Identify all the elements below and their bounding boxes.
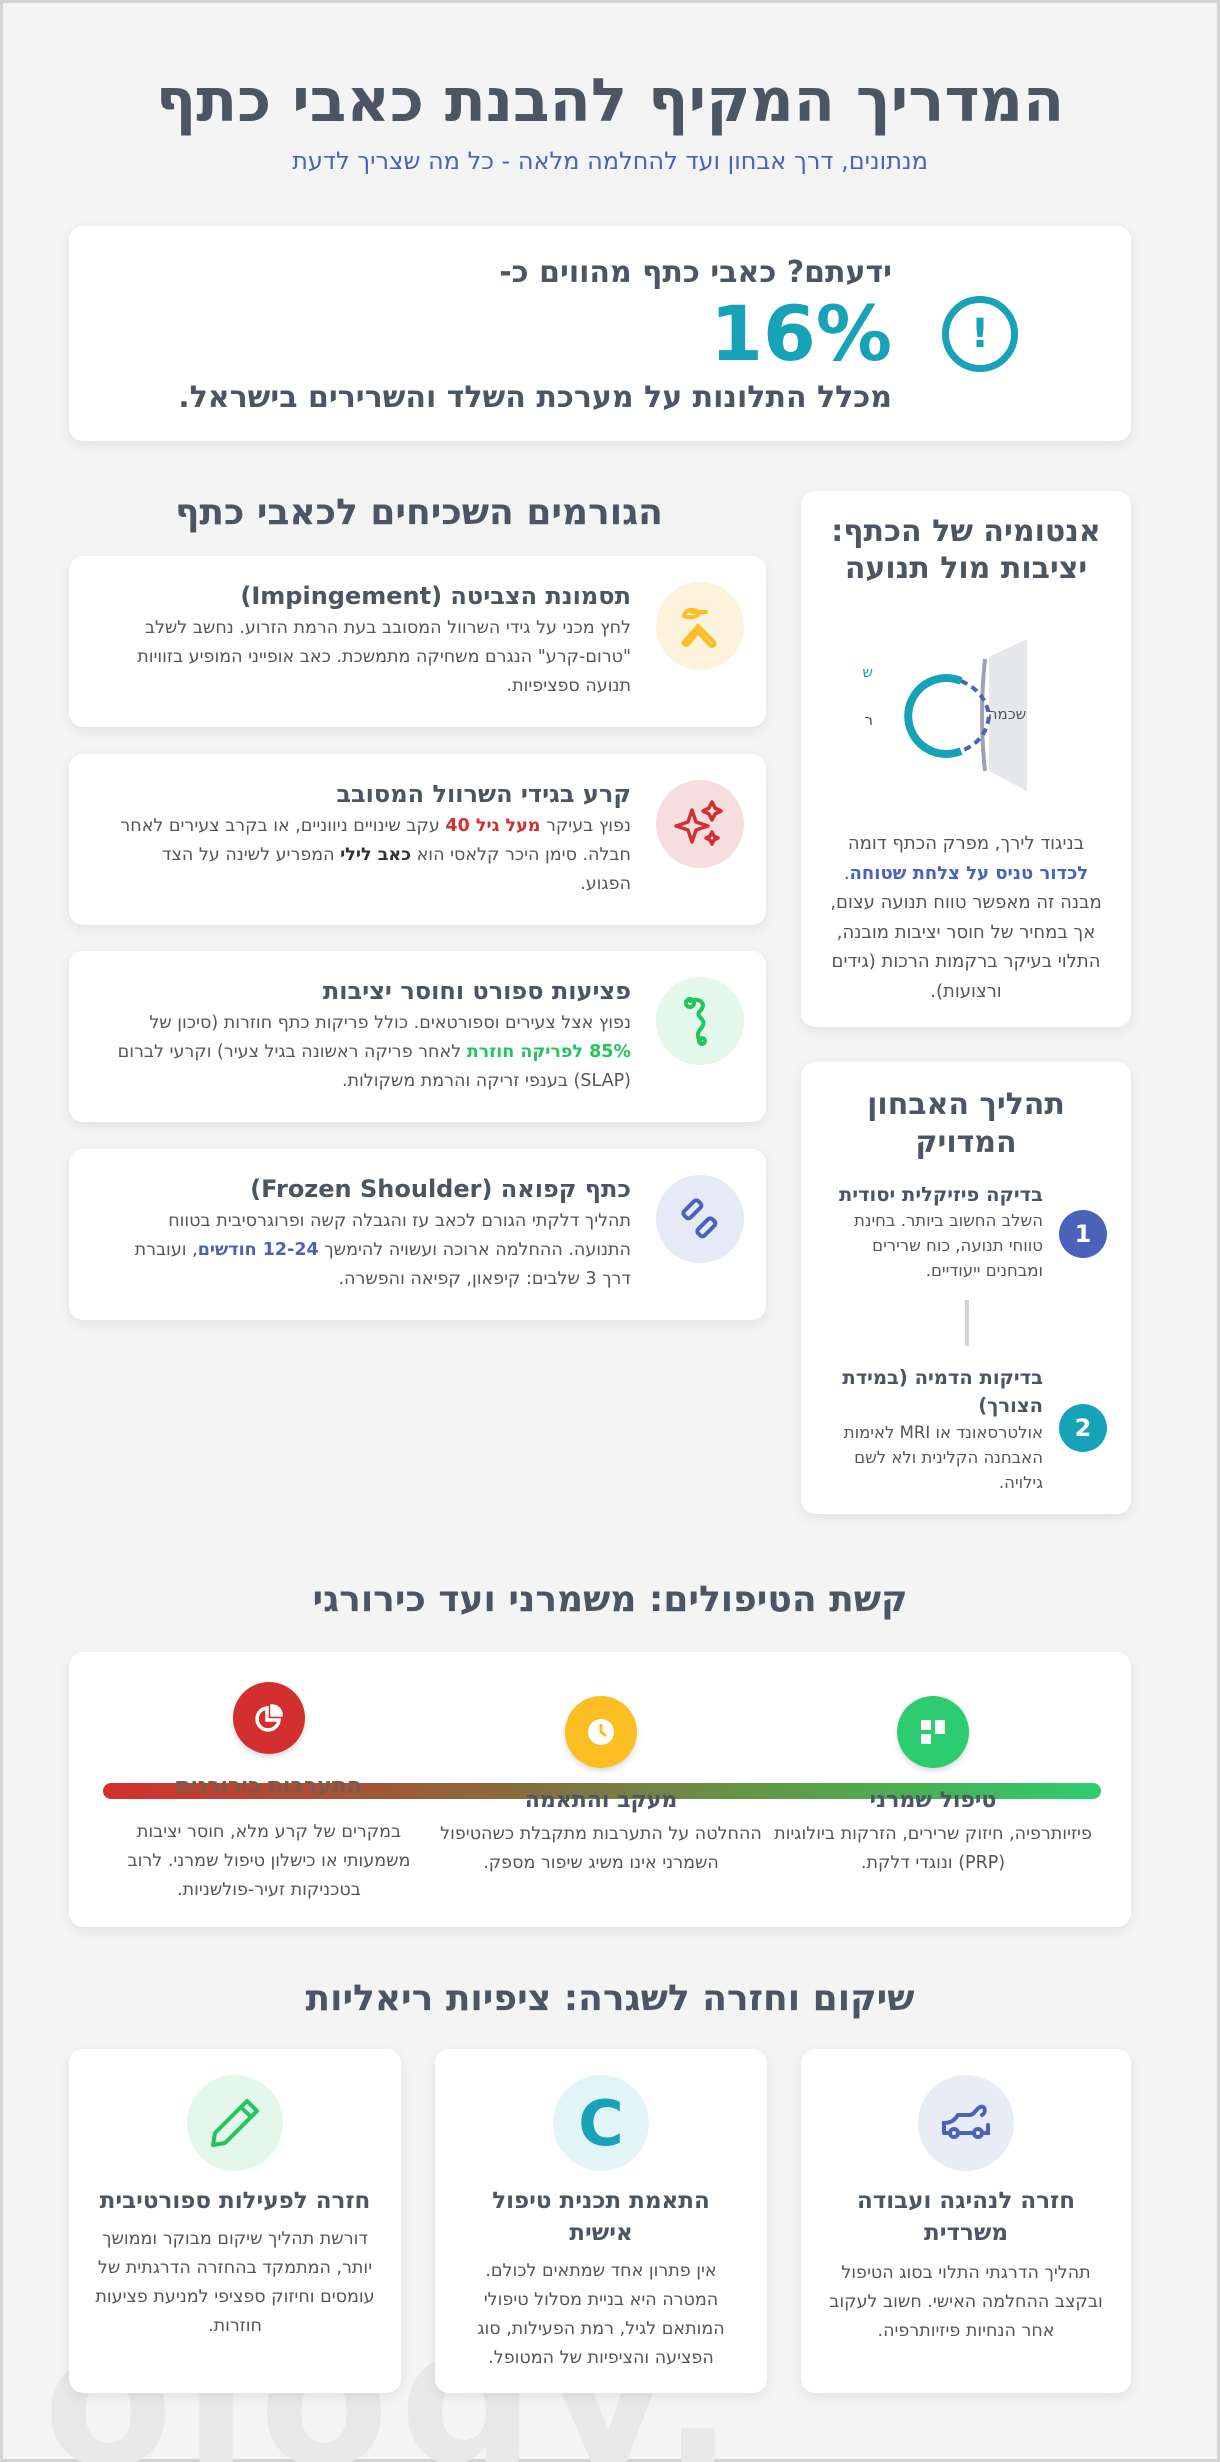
heading: anatomy: אנטומיה של הכתף: (831, 514, 1101, 549)
stage: monitoring (440, 1696, 762, 1873)
panel: cause 4 (69, 1149, 766, 1320)
icon: letter c: C (578, 2086, 624, 2160)
stage: monitoring: מעקב והתאמה (525, 1788, 677, 1813)
panel: cause 2: קרע בגידי השרוול המסובב (336, 780, 631, 808)
stage: conservative: טיפול שמרני (870, 1788, 996, 1813)
panel: cause 2: חבלה. סימן היכר קלאסי הוא כאב לילי המפריע לשינה על הצד (162, 845, 631, 865)
icon: exclamation: ! (971, 311, 989, 357)
panel: cause 2: הפגוע. (580, 874, 631, 894)
icon: car (918, 2075, 1014, 2171)
heading: diagnosis: המדויק (915, 1125, 1017, 1160)
panel: rehab driving (801, 2049, 1131, 2393)
icon: pencil (187, 2075, 283, 2171)
panel: cause 4: תהליך דלקתי הגורם לכאב עז והגבלה קשה ופרוגרסיבית בטווח (168, 1211, 631, 1231)
heading: diagnosis (867, 1087, 1065, 1160)
panel: cause 3: נפוץ אצל צעירים וספורטאים. כולל פריקות כתף חוזרות (סיכון של (149, 1013, 631, 1033)
panel: diagnosis (801, 1062, 1131, 1514)
stat text: ידעתם? כאבי כתף מהווים כ- (499, 255, 892, 290)
panel: cause 1 (69, 556, 766, 727)
step 2: בדיקות הדמיה (במידת הצורך) (842, 1366, 1043, 1417)
icon: sparkles (656, 780, 744, 868)
step 1: השלב החשוב ביותר. בחינת טווחי תנועה, כוח שרירים ומבחנים ייעודיים. (854, 1211, 1043, 1280)
text: anatomy: ורצועות). (930, 980, 1002, 1002)
panel: rehab personal plan (435, 2049, 767, 2393)
stage: surgery (128, 1682, 410, 1900)
panel: cause 1: לחץ מכני על גידי השרוול המסובב בעת הרמת הזרוע. נחשב לשלב "טרום-קרע" הנגרם משחיקה מתמשכת. כאב אופייני המופיע בזוויות תנועה ספציפיות. (137, 618, 631, 696)
icon: impingement (656, 582, 744, 670)
step 2 (842, 1366, 1107, 1492)
panel: rehab driving: חזרה לנהיגה ועבודה משרדית (857, 2188, 1075, 2246)
panel: cause 4: התנועה. ההחלמה ארוכה ועשויה להימשך 12-24 חודשים, ועוברת (135, 1240, 631, 1260)
heading: diagnosis: תהליך האבחון (867, 1087, 1065, 1122)
heading: treatments: קשת הטיפולים: משמרני ועד כירורגי (312, 1579, 908, 1620)
stat card (69, 226, 1131, 441)
title: המדריך המקיף להבנת כאבי כתף (156, 66, 1064, 136)
stat text: מכלל התלונות על מערכת השלד והשרירים בישראל. (178, 380, 892, 415)
stage: conservative: פיזיותרפיה, חיזוק שרירים, הזרקות ביולוגיות (PRP) ונוגדי דלקת. (774, 1824, 1092, 1873)
stage: conservative (774, 1696, 1092, 1873)
icon: dna squiggle (656, 977, 744, 1065)
text: anatomy (830, 833, 1102, 1002)
panel: rehab sports: חזרה לפעילות ספורטיבית (100, 2188, 370, 2214)
diagram: shoulder joint (862, 639, 1027, 791)
stage: surgery: במקרים של קרע מלא, חוסר יציבות משמעותי או כישלון טיפול שמרני. לרוב בטכניקות זעיר-פולשניות. (128, 1822, 410, 1900)
panel: rehab sports: דורשת תהליך שיקום מבוקר וממושך יותר, המתמקד בהחזרה הדרגתית של עומסים וחיזוק ספציפי למניעת פציעות חוזרות. (95, 2229, 375, 2336)
text: anatomy: התלוי בעיקר ברקמות הרכות (גידים (832, 951, 1100, 972)
panel: rehab personal plan: התאמת תכנית טיפול אישית (492, 2188, 710, 2246)
stat text: 16% (710, 289, 892, 378)
diagram: shoulder joint: שכמה (988, 705, 1026, 723)
stat text (178, 255, 892, 415)
panel: cause 4: דרך 3 שלבים: קיפאון, קפיאה והפשרה. (338, 1269, 631, 1289)
panel: treatment spectrum (69, 1652, 1131, 1927)
stage: monitoring: ההחלטה על התערבות מתקבלת כשהטיפול השמרני אינו משיג שיפור מספק. (440, 1824, 762, 1873)
step 1 (839, 1183, 1107, 1280)
panel: cause 2 (69, 754, 766, 925)
panel: cause 3: (SLAP) בענפי זריקה והרמת משקולות. (342, 1071, 631, 1091)
text: anatomy: לכדור טניס על צלחת שטוחה. (844, 862, 1088, 884)
panel: cause 3 (69, 951, 766, 1122)
panel: cause 3: 85% לפריקה חוזרת לאחר פריקה ראשונה בגיל צעיר) וקרעי לברום (118, 1042, 631, 1062)
panel: cause 4: כתף קפואה (Frozen Shoulder) (250, 1175, 631, 1203)
icon: letter c (553, 2075, 649, 2171)
gradient bar (103, 1783, 1101, 1799)
panel: rehab sports (69, 2049, 401, 2393)
heading: causes: הגורמים השכיחים לכאבי כתף (175, 492, 663, 533)
stage: surgery: התערבות כירורגית (176, 1774, 362, 1799)
panel: rehab driving: תהליך הדרגתי התלוי בסוג הטיפול ובקצב ההחלמה האישי. חשוב לעקוב אחר הנחיות פיזיותרפיה. (829, 2263, 1103, 2341)
panel: rehab personal plan: אין פתרון אחד שמתאים לכולם. המטרה היא בניית מסלול טיפולי המותאם לגיל, רמת הפעילות, סוג הפציעה והציפיות של המטופל. (477, 2261, 725, 2368)
panel: cause 3: פציעות ספורט וחוסר יציבות (323, 977, 631, 1005)
icon: frozen link (656, 1175, 744, 1263)
heading: anatomy: יציבות מול תנועה (845, 551, 1087, 586)
icon: exclamation (942, 296, 1018, 372)
step 1: 1 (1075, 1220, 1091, 1248)
step 1: בדיקה פיזיקלית יסודית (839, 1183, 1043, 1206)
subtitle: מנתונים, דרך אבחון ועד להחלמה מלאה - כל מה שצריך לדעת (292, 147, 928, 175)
heading: rehab: שיקום וחזרה לשגרה: ציפיות ריאליות (306, 1978, 914, 2019)
panel: anatomy (801, 491, 1131, 1027)
text: anatomy: מבנה זה מאפשר טווח תנועה עצום, (830, 892, 1102, 913)
text: anatomy: בניגוד לירך, מפרק הכתף דומה (848, 833, 1084, 854)
diagram: shoulder joint: ש (862, 663, 873, 681)
panel: cause 2: נפוץ בעיקר מעל גיל 40 עקב שינויים ניווניים, או בקרב צעירים לאחר (120, 816, 631, 836)
heading: anatomy (831, 514, 1101, 586)
text: anatomy: אך במחיר של חוסר יציבות מובנה, (837, 922, 1095, 942)
diagram: shoulder joint: ר (865, 711, 873, 729)
step 2: 2 (1075, 1414, 1091, 1442)
step 2: אולטרסאונד או MRI לאימות האבחנה הקלינית ולא לשם גילויה. (844, 1423, 1043, 1492)
panel: cause 1: תסמונת הצביטה (Impingement) (240, 582, 631, 610)
